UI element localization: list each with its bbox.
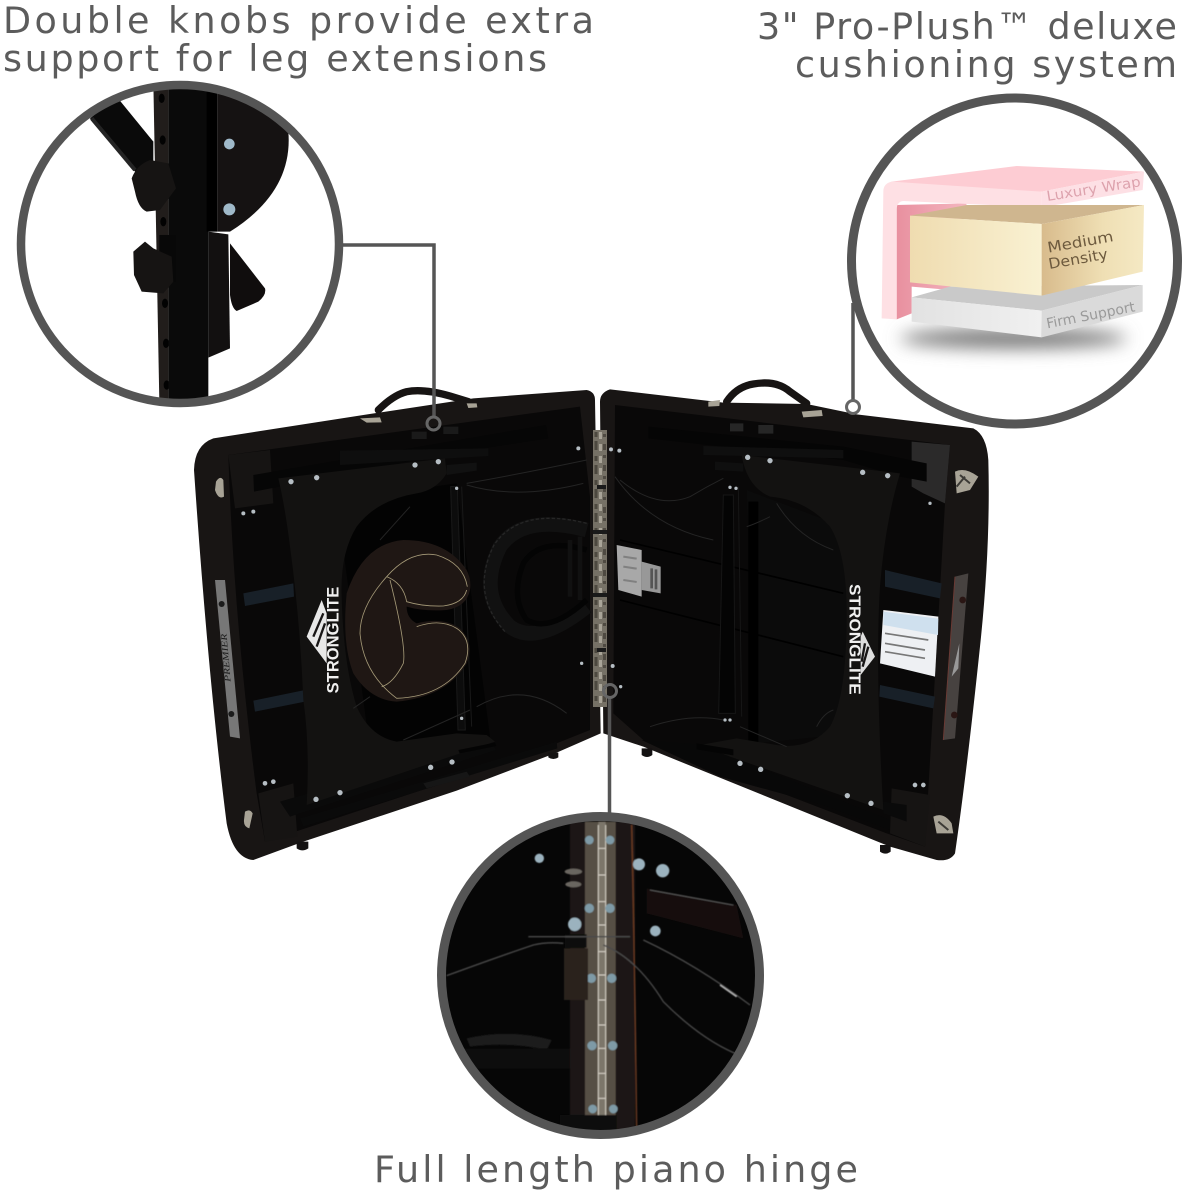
connector line: hinge [604,684,616,815]
frame bolts [535,854,669,936]
centre leg [451,487,472,730]
cream medium layer [910,205,1144,296]
piano hinge strip [593,430,607,707]
shadow [900,328,1127,348]
panel seams [620,540,843,657]
lower arm [230,243,265,311]
outer cushion shell [600,389,989,860]
foam labels [1045,174,1142,332]
centre leg [719,487,742,717]
bottom rail [280,740,557,827]
heading: double knobs: support for leg extensions [3,37,547,80]
face cushion [345,540,470,702]
corner bracket [890,788,930,847]
mesh face cradle [484,518,587,633]
hinge screws [585,836,618,1113]
heading: cushioning system: cushioning system [795,43,1177,86]
handle [727,383,807,403]
pink inner [897,203,967,319]
heading: double knobs: Double knobs provide extra [3,0,594,42]
heading: cushioning system [757,5,1177,86]
knobs [412,427,458,439]
heading: double knobs [3,0,594,80]
velcro patch [912,442,950,503]
grey firm layer [912,285,1143,337]
foam labels: Luxury Wrap [1045,174,1142,205]
strongLite brand logo: STRONGLITE [324,587,343,693]
massage table: right half [600,383,989,860]
face cradle hole [337,483,490,750]
foot pegs [642,748,891,854]
latches [708,400,978,833]
wires [447,937,750,1053]
foam labels: Firm Support [1045,299,1137,332]
plate bolts [241,446,583,802]
hole [747,490,853,743]
strongLite brand logo: STRONGLITE [845,584,862,695]
diagonal arm [90,97,153,172]
corner brackets [228,450,297,842]
straps [879,570,942,708]
metal plate [943,573,968,740]
heading: piano hinge: Full length piano hinge [374,1148,858,1191]
callout: cushioning system [852,98,1178,424]
pink wrap [882,166,1144,319]
top rail [253,425,548,492]
massage table: left half [194,390,601,860]
strongLite brand logo [307,587,343,693]
foam labels: Medium [1046,228,1115,257]
wires [353,460,587,740]
premier metal plate: PREMIER [218,632,233,684]
side rails [570,822,587,1132]
foot pegs [297,753,558,850]
knobs [730,423,773,434]
cradle blur [467,1034,551,1048]
callout: double knobs close-up [21,82,339,405]
leg tube main [168,82,208,405]
straps [243,583,305,712]
strongLite brand logo [845,584,875,695]
premier metal plate [215,580,240,738]
serial label white [880,610,938,677]
bottom rail [642,740,890,830]
connector line: knobs [343,245,440,430]
top rail [648,427,927,482]
wires [615,477,833,747]
leg tube perforated [153,82,168,402]
handle [378,391,468,410]
callout: piano hinge close-up [442,816,760,1134]
bolts [224,139,235,149]
folding plate [700,455,900,810]
lower knob [133,242,173,293]
block [564,948,588,1000]
foam labels: Density [1047,246,1109,273]
outer cushion shell [194,390,601,860]
folding plate [278,458,495,805]
inner frame panel [228,407,590,842]
lower knob base [159,235,168,256]
service label grey [617,545,661,597]
inner frame panel [613,405,950,847]
upper knob [132,160,176,212]
hinge leaf [585,822,616,1132]
plate bolts [609,447,932,806]
right bracket [647,888,743,938]
heading: cushioning system: 3" Pro-Plush™ deluxe [757,5,1177,48]
bracket plate [217,82,289,232]
latches [215,403,477,828]
connector line: cushioning [846,303,860,414]
